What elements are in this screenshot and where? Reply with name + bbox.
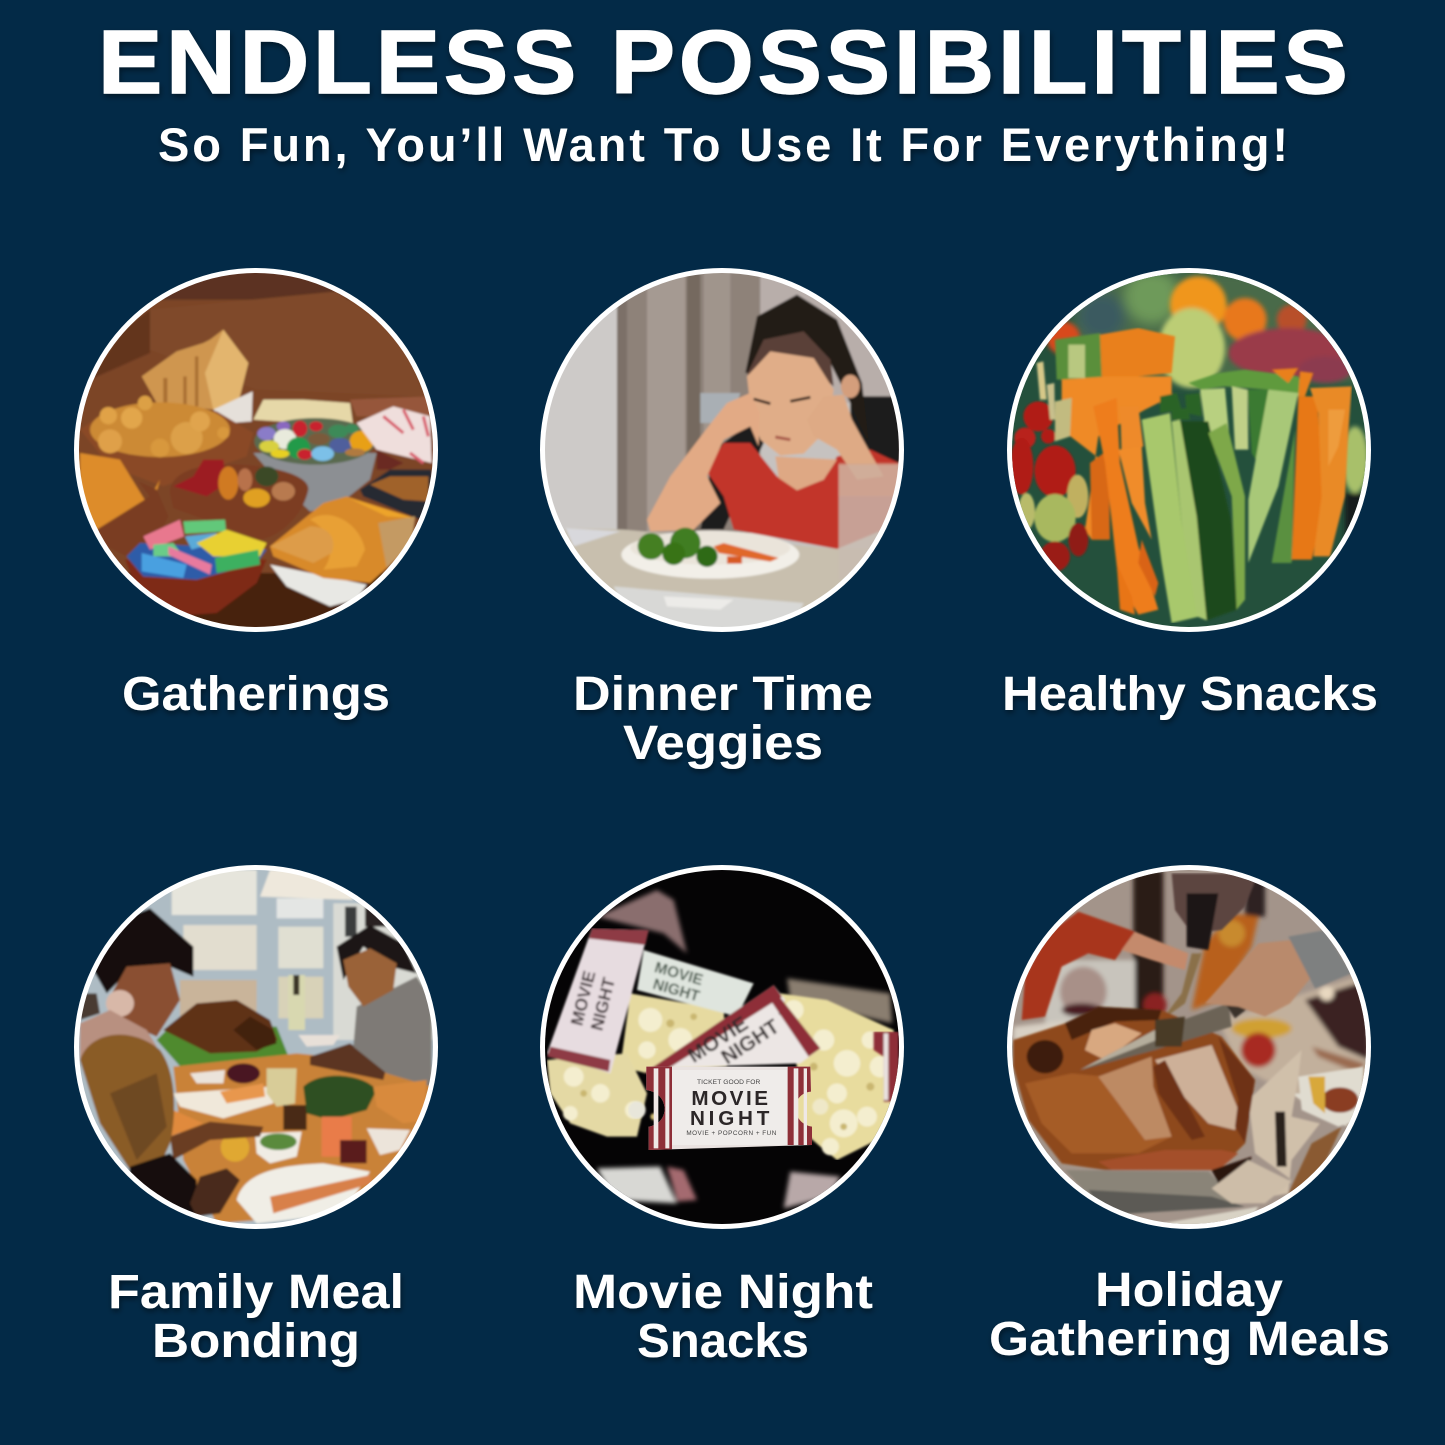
label: dinner time veggies: Veggies (623, 717, 823, 770)
label: gatherings: Gatherings (122, 668, 390, 721)
label: holiday gathering meals: Holiday (1095, 1264, 1283, 1317)
panel: movie night snacks photo (537, 860, 907, 1230)
panel: movie night snacks photo: NIGHT (586, 975, 619, 1033)
panel: dinner time veggies photo (537, 263, 907, 633)
panel: holiday gathering meals photo (1005, 860, 1375, 1230)
label: holiday gathering meals (989, 1264, 1390, 1366)
front ticket: MOVIE (691, 1087, 768, 1110)
front ticket (646, 1067, 812, 1150)
panel: gatherings photo (70, 263, 440, 633)
panel: healthy snacks photo (1005, 263, 1375, 633)
label: healthy snacks: Healthy Snacks (1002, 668, 1378, 721)
label: movie night snacks: Snacks (637, 1315, 809, 1368)
label: dinner time veggies: Dinner Time (573, 668, 873, 721)
panel: movie night snacks photo: MOVIE (684, 1012, 752, 1068)
panel: movie night snacks photo: NIGHT (651, 976, 702, 1005)
label: movie night snacks: Movie Night (573, 1266, 873, 1319)
front ticket: NIGHT (690, 1107, 770, 1130)
panel: movie night snacks photo: NIGHT (717, 1015, 784, 1069)
label: holiday gathering meals: Gathering Meals (989, 1313, 1390, 1366)
front ticket: TICKET GOOD FOR (697, 1079, 761, 1086)
panel: movie night snacks photo: MOVIE (653, 959, 705, 989)
label: dinner time veggies (573, 668, 873, 770)
label: movie night snacks (573, 1266, 873, 1368)
panel: movie night snacks photo: MOVIE (566, 969, 599, 1028)
title: ENDLESS POSSIBILITIES (98, 12, 1348, 112)
front ticket: MOVIE + POPCORN + FUN (686, 1130, 777, 1137)
label: family meal bonding: Family Meal (108, 1266, 404, 1319)
panel: family meal bonding photo (70, 860, 440, 1230)
label: family meal bonding (108, 1266, 404, 1368)
label: family meal bonding: Bonding (152, 1315, 360, 1368)
subtitle: So Fun, You’ll Want To Use It For Everything! (158, 118, 1288, 171)
